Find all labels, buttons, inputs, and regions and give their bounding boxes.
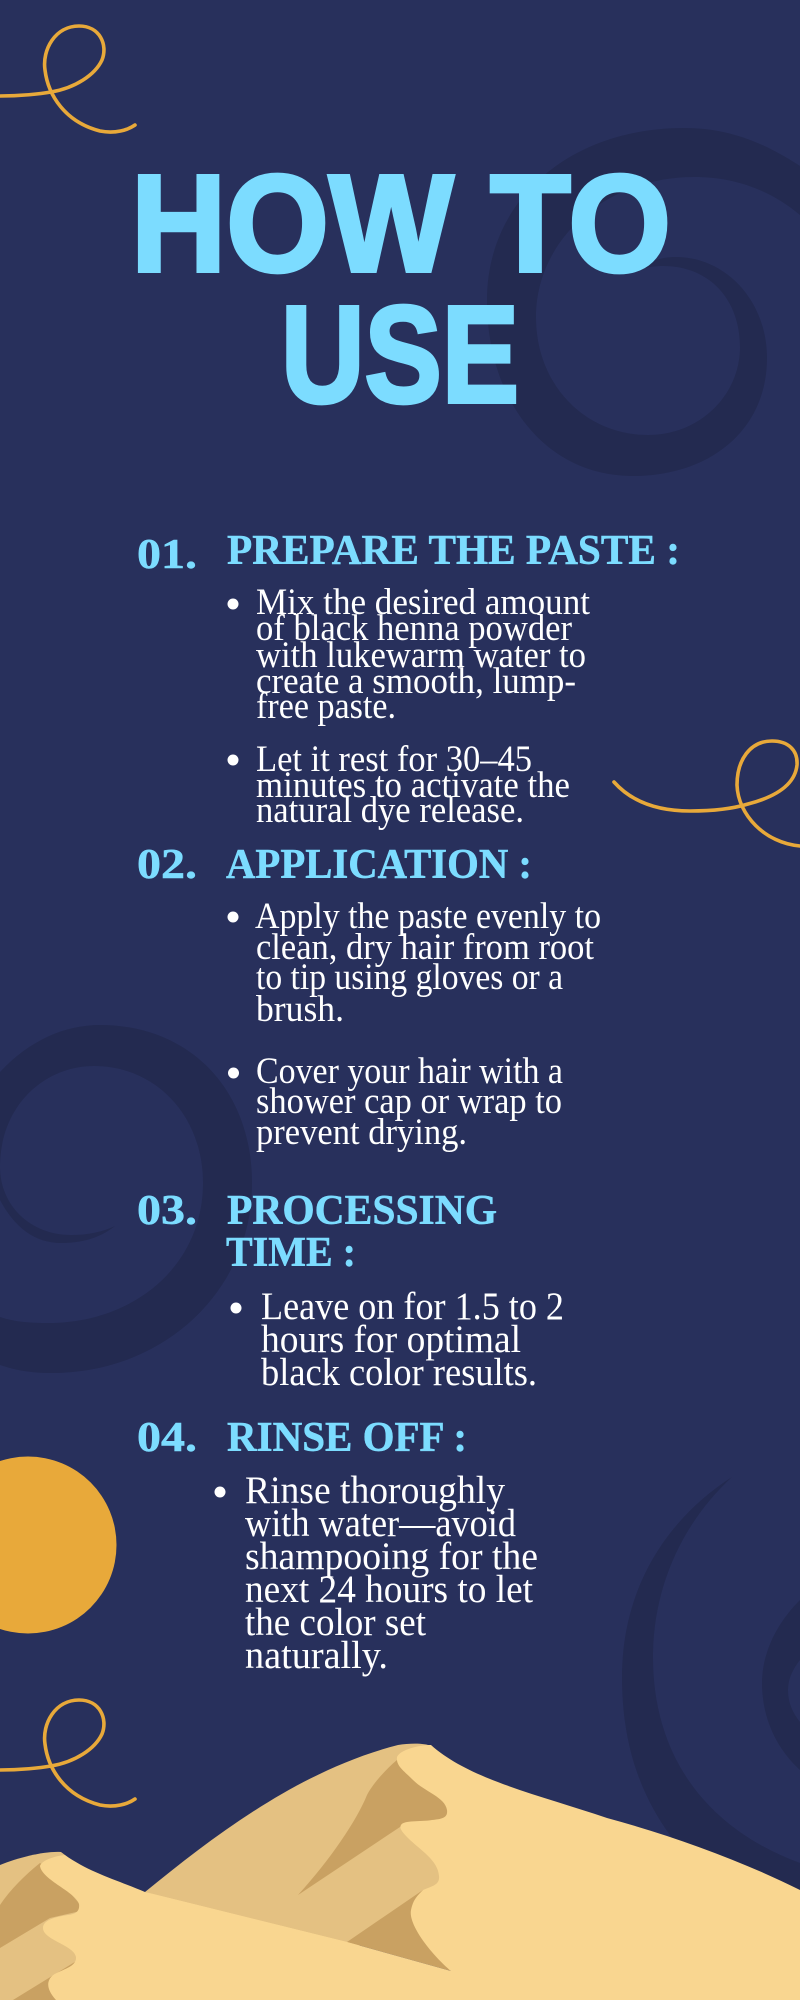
step 04 bullet: naturally. (245, 1634, 388, 1677)
step 01 bullet two (228, 739, 570, 831)
icon: orange sun (0, 1456, 116, 1634)
step 01 heading: PREPARE THE PASTE : (227, 528, 680, 574)
step 04 bullet: Rinse thoroughly (245, 1469, 505, 1512)
step 03 bullet: Leave on for 1.5 to 2 (261, 1285, 564, 1328)
step 03 heading: TIME : (226, 1230, 356, 1276)
step 01 (137, 528, 680, 831)
step 02 heading: 02. (137, 842, 197, 888)
step 02 heading: APPLICATION : (226, 842, 532, 888)
step 01 bullet one: with lukewarm water to (256, 635, 586, 676)
step 04 bullet: shampooing for the (245, 1535, 538, 1578)
step 02 bullet two (228, 1051, 563, 1153)
step 02 bullet two: Cover your hair with a (256, 1051, 563, 1092)
step 02 bullet one: Apply the paste evenly to (255, 896, 601, 937)
step 03 heading (137, 1188, 497, 1276)
step 01 bullet two: natural dye release. (256, 790, 524, 831)
title: HOW TO (131, 147, 671, 301)
step 01 bullet one: free paste. (256, 686, 396, 727)
swirl: bottom right (622, 1477, 800, 1900)
step 01 heading: 01. (137, 532, 197, 578)
squiggle: right (614, 741, 800, 846)
squiggle: top left (0, 26, 135, 132)
swirl: middle left (0, 1025, 252, 1373)
step 04 heading: 04. (137, 1415, 197, 1461)
step 02 bullet one (228, 896, 601, 1030)
step 01 bullet two: minutes to activate the (256, 765, 570, 806)
step 01 bullet one: Mix the desired amount (256, 582, 591, 623)
step 02 (137, 842, 601, 1153)
title: USE (281, 278, 519, 432)
step 02 bullet two: prevent drying. (256, 1112, 467, 1153)
sand dunes (0, 1744, 800, 2000)
step 04 bullet: with water—avoid (245, 1502, 516, 1545)
step 03 bullet: black color results. (261, 1351, 537, 1394)
step 01 bullet one: create a smooth, lump- (256, 661, 576, 702)
step 01 bullet one: of black henna powder (256, 608, 572, 649)
step 04 bullet (214, 1469, 538, 1677)
step 04 bullet: the color set (245, 1601, 426, 1644)
step 03 (137, 1188, 564, 1394)
step 03 heading: PROCESSING (227, 1188, 497, 1234)
step 01 bullet two: Let it rest for 30–45 (256, 739, 532, 780)
step 01 bullet one (228, 582, 591, 727)
step 02 bullet one: to tip using gloves or a (256, 957, 563, 998)
step 03 bullet (230, 1285, 564, 1394)
step 04 (137, 1415, 538, 1677)
squiggle: bottom left (0, 1700, 135, 1806)
step 02 bullet one: brush. (256, 989, 344, 1030)
step 02 bullet two: shower cap or wrap to (256, 1081, 562, 1122)
step 03 heading: 03. (137, 1188, 197, 1234)
step 04 bullet: next 24 hours to let (245, 1568, 533, 1611)
swirl: top right (487, 128, 800, 476)
step 02 bullet one: clean, dry hair from root (256, 927, 595, 968)
step 03 bullet: hours for optimal (261, 1318, 521, 1361)
title (131, 147, 671, 432)
step 04 heading: RINSE OFF : (227, 1415, 467, 1461)
